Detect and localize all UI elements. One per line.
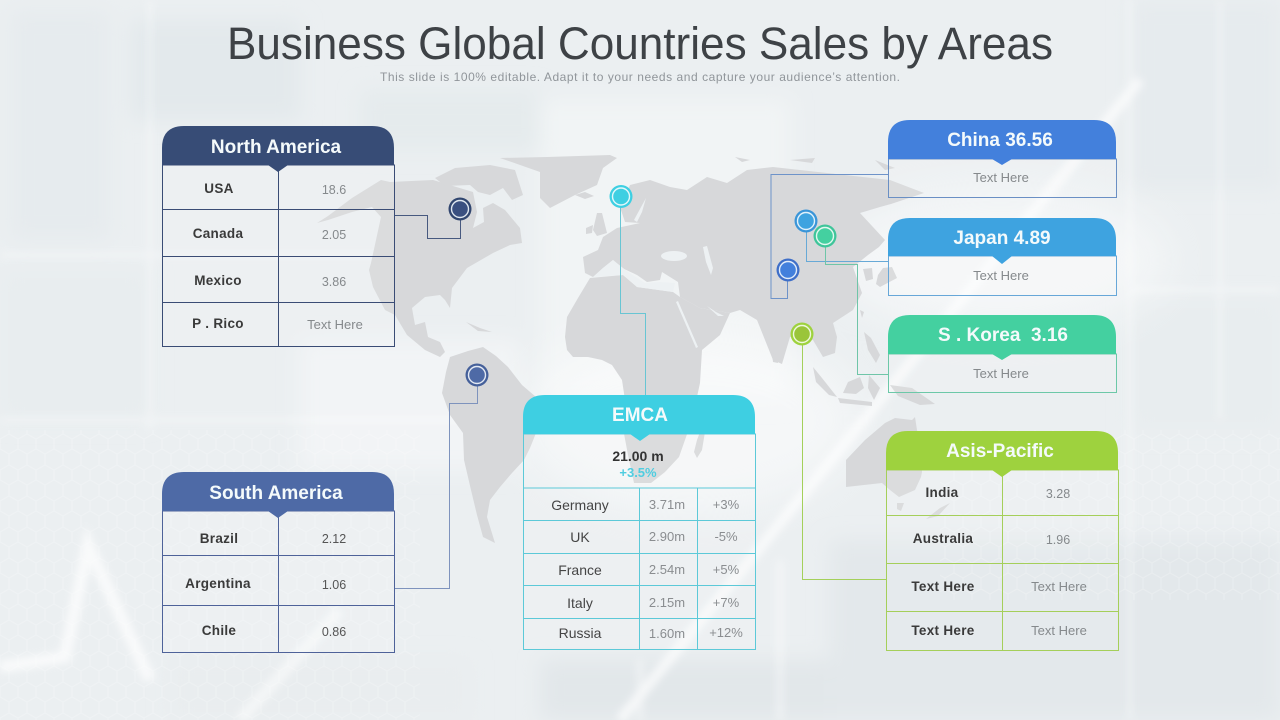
row: Brazil [200, 531, 346, 546]
header: South America: South America [209, 483, 343, 504]
table: EMCA [523, 434, 756, 650]
row: Text Here 2: Text Here [1031, 623, 1087, 638]
row: Germany: 3.71m [649, 497, 685, 512]
panel: South Korea [888, 315, 1116, 392]
header: North America: North America [211, 137, 342, 158]
row: Australia [913, 531, 1070, 547]
row: Mexico: 3.86 [322, 275, 346, 289]
row: Chile: 0.86 [322, 625, 346, 639]
row: Mexico [194, 273, 346, 289]
row: Chile [202, 623, 346, 639]
row: Text Here 1: Text Here [1031, 579, 1087, 594]
row: Canada: Canada [193, 226, 243, 241]
title: Business Global Countries Sales by Areas [227, 18, 1053, 69]
note: South Korea: Text Here [973, 366, 1029, 381]
connector: Asia-Pacific [802, 345, 886, 580]
row: UK: 2.90m [649, 529, 685, 544]
panel: South America [162, 472, 394, 652]
header: Japan [888, 218, 1116, 264]
header: Asia-Pacific: Asis-Pacific [946, 441, 1054, 462]
pin: South America [466, 364, 488, 386]
row: Canada: 2.05 [322, 228, 346, 242]
pin: South Korea [814, 224, 836, 248]
row: Germany: +3% [713, 497, 740, 512]
panel: Asia-Pacific [886, 431, 1118, 650]
panel: EMCA [523, 395, 756, 650]
row: India: India [925, 485, 959, 500]
row: Canada [193, 226, 346, 242]
row: Text Here 2: Text Here [911, 623, 975, 638]
header: China: China 36.56 [947, 130, 1053, 151]
subtitle: This slide is 100% editable. Adapt it to your needs and capture your audience’s attention. [380, 70, 900, 84]
row: Argentina [185, 576, 346, 592]
header: North America [162, 126, 394, 172]
header: South Korea: S . Korea 3.16 [938, 325, 1068, 346]
row: Brazil: Brazil [200, 531, 238, 546]
row: Text Here 1: Text Here [911, 579, 975, 594]
header: EMCA: EMCA [612, 405, 668, 426]
table: South America [162, 511, 394, 652]
row: Russia: +12% [709, 625, 743, 640]
row: Italy: Italy [567, 595, 593, 611]
row: P. Rico: P . Rico [192, 316, 244, 331]
connector: South Korea [826, 247, 888, 374]
pin: Japan [794, 210, 818, 232]
note: China: Text Here [973, 170, 1029, 185]
pin: Asia-Pacific [790, 322, 814, 346]
row: Mexico: Mexico [194, 273, 242, 288]
row: Brazil: 2.12 [322, 532, 346, 546]
row: Russia [559, 625, 743, 641]
row: Text Here 2 [911, 623, 1087, 638]
row: Italy: 2.15m [649, 595, 685, 610]
row: France: +5% [713, 562, 740, 577]
row: Chile: Chile [202, 623, 236, 638]
table: North America [162, 165, 394, 346]
total: EMCA: 21.00 m [612, 448, 664, 464]
row: USA: USA [204, 181, 234, 196]
row: Germany: Germany [551, 497, 609, 513]
pin: EMCA [610, 185, 632, 208]
row: France: 2.54m [649, 562, 685, 577]
note: Japan: Text Here [973, 268, 1029, 283]
connector: South America [394, 386, 478, 588]
row: P. Rico [192, 316, 363, 332]
header: EMCA [523, 395, 755, 441]
header: China [888, 120, 1116, 165]
row: Italy: +7% [713, 595, 740, 610]
header: South America [162, 472, 394, 518]
row: Argentina: Argentina [185, 576, 251, 591]
table: Asia-Pacific [886, 470, 1118, 650]
row: Australia: Australia [913, 531, 973, 546]
row: USA [204, 181, 346, 197]
panel: North America [162, 126, 394, 346]
world map [317, 155, 950, 543]
total: EMCA: +3.5% [619, 465, 657, 480]
total: EMCA [612, 448, 664, 480]
row: UK: -5% [714, 529, 738, 544]
row: Russia: 1.60m [649, 626, 685, 641]
row: UK [570, 529, 738, 545]
row: France [558, 562, 740, 578]
row: Russia: Russia [559, 625, 602, 641]
connector: Japan [806, 232, 888, 262]
pin: North America [448, 198, 472, 220]
row: Australia: 1.96 [1046, 533, 1070, 547]
connector: EMCA [620, 207, 646, 395]
row: P. Rico: Text Here [307, 317, 363, 332]
row: India: 3.28 [1046, 487, 1070, 501]
pin: China [776, 258, 800, 282]
row: Italy [567, 595, 740, 611]
row: Argentina: 1.06 [322, 578, 346, 592]
header: South Korea [888, 315, 1116, 360]
header: Asia-Pacific [886, 431, 1118, 477]
panel: Japan [888, 218, 1116, 296]
row: Germany [551, 497, 740, 513]
connector: North America [394, 216, 460, 238]
panel: China [888, 120, 1116, 198]
row: Text Here 1 [911, 579, 1087, 594]
row: India [925, 485, 1070, 501]
row: France: France [558, 562, 602, 578]
header: Japan: Japan 4.89 [953, 228, 1051, 249]
row: UK: UK [570, 529, 590, 545]
connector: China [771, 174, 888, 298]
row: USA: 18.6 [322, 183, 346, 197]
